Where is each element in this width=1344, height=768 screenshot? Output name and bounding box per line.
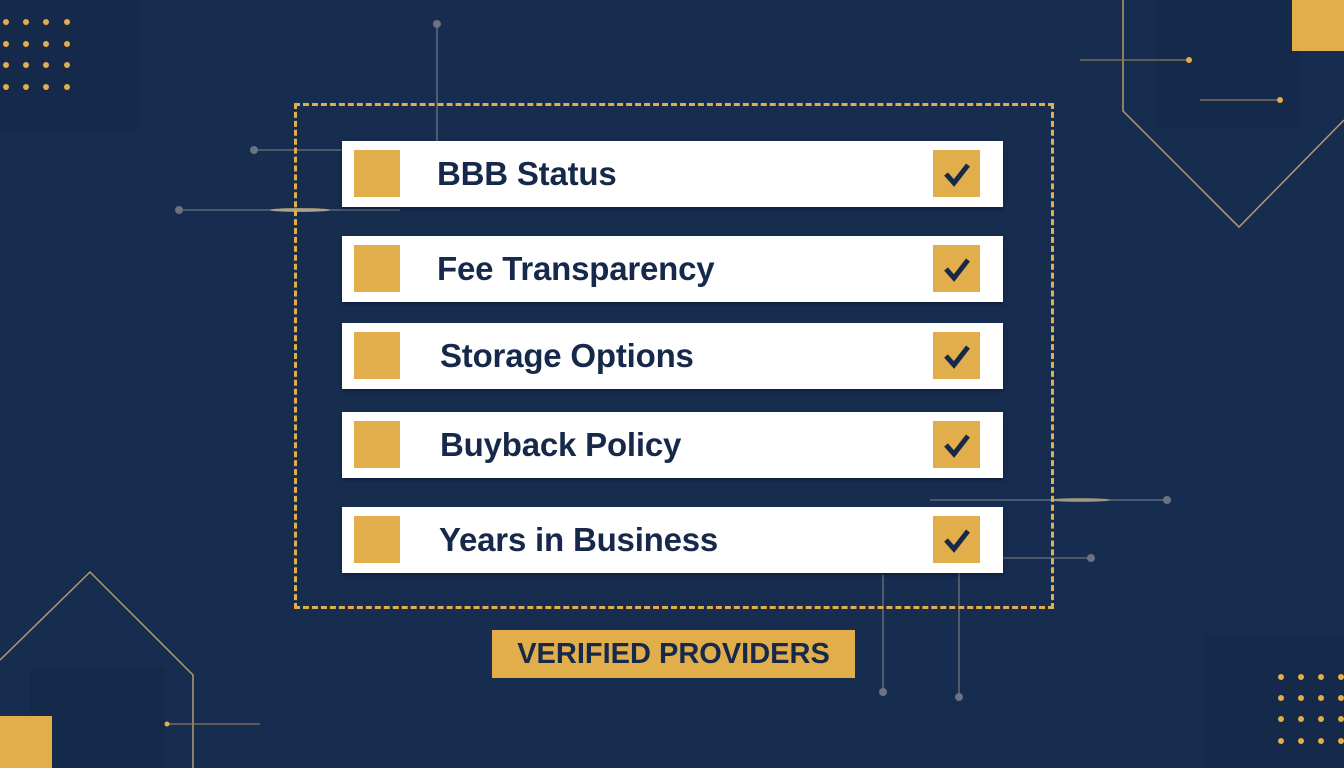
row: Fee Transparency: Fee Transparency — [437, 250, 714, 287]
row: BBB Status — [342, 141, 1003, 207]
checklist — [340, 141, 1005, 577]
row: Storage Options: Storage Options — [440, 337, 694, 374]
badge: verified providers — [492, 630, 855, 678]
dashed frame — [294, 103, 1054, 609]
row: BBB Status: BBB Status — [437, 155, 617, 192]
row: Years in Business — [342, 507, 1003, 573]
row: Buyback Policy: Buyback Policy — [440, 426, 681, 463]
row: Years in Business: Years in Business — [439, 521, 718, 558]
row: Storage Options — [342, 323, 1003, 389]
badge: verified providers: VERIFIED PROVIDERS — [517, 638, 830, 670]
row: Fee Transparency — [342, 236, 1003, 302]
row: Buyback Policy — [342, 412, 1003, 478]
